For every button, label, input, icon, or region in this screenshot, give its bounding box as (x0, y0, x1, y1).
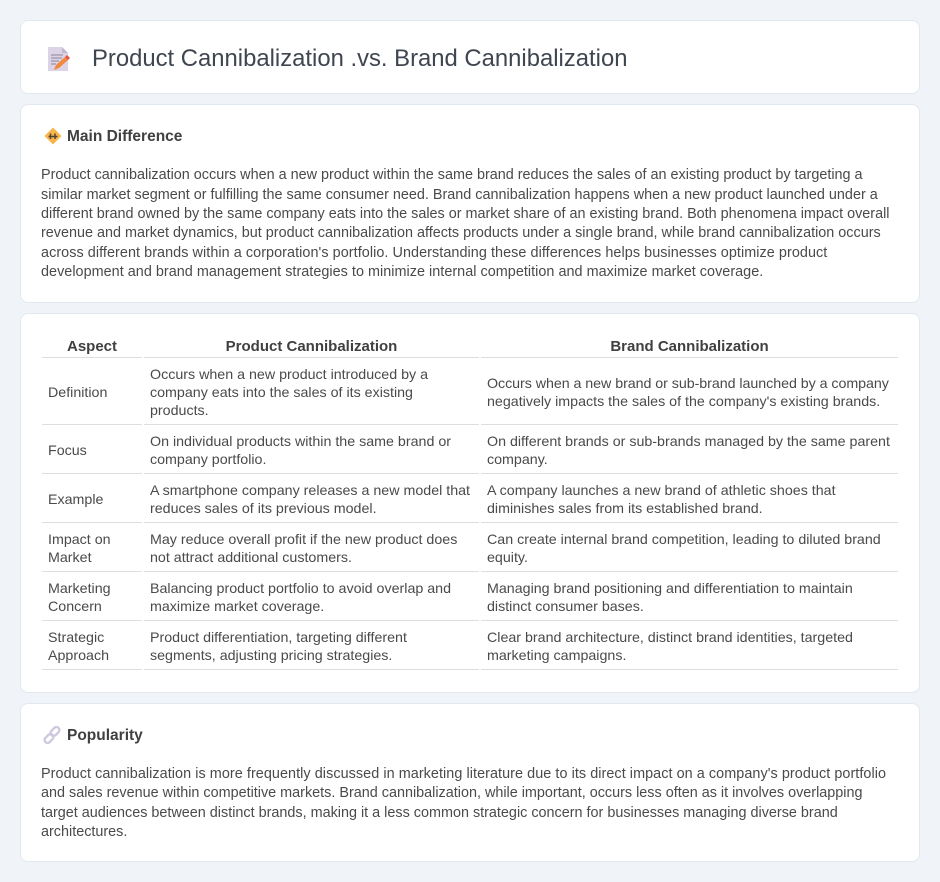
row: impact on market: May reduce overall profit if the new product does (150, 532, 457, 548)
text: popularity paragraph: architectures. (41, 824, 127, 840)
row: definition: Occurs when a new product introduced by a (150, 367, 428, 383)
row: focus: On different brands or sub-brands managed by the same parent (487, 434, 890, 450)
row: marketing concern: distinct consumer bases. (487, 599, 644, 615)
text: main difference paragraph: similar market segment or fulfilling the same consumer need. Brand cannibalization happens when a new product launched under a (41, 187, 878, 203)
text: popularity paragraph: and sales revenue within competitive markets. Brand cannibalization, while important, occurs less often as it involves overlapping (41, 785, 862, 801)
icon: chain link (43, 726, 60, 744)
panel: popularity (20, 703, 920, 862)
row: strategic approach (48, 630, 853, 664)
row: focus: On individual products within the same brand or (150, 434, 451, 450)
row: definition: Definition (48, 385, 107, 401)
text: main difference paragraph (41, 167, 889, 280)
row: definition: company eats into the sales of its existing (150, 385, 413, 401)
row: example: A smartphone company releases a new model that (150, 483, 470, 499)
table header: Brand Cannibalization (610, 338, 769, 355)
row: focus: Focus (48, 443, 87, 459)
row: definition: Occurs when a new brand or sub-brand launched by a company (487, 376, 889, 392)
row: example (48, 483, 836, 517)
row: impact on market: Can create internal brand competition, leading to diluted brand (487, 532, 881, 548)
row: definition: negatively impacts the sales of the company's existing brands. (487, 394, 880, 410)
row: example: A company launches a new brand of athletic shoes that (487, 483, 836, 499)
row: strategic approach: Approach (48, 648, 109, 664)
header card (20, 20, 920, 94)
row: marketing concern: maximize market coverage. (150, 599, 324, 615)
row: focus: company. (487, 452, 548, 468)
text: main difference paragraph: across different brands within a corporation's portfolio. Understanding these differences helps businesses optimize product (41, 245, 827, 261)
row: focus: company portfolio. (150, 452, 266, 468)
row: example: diminishes sales from its established brand. (487, 501, 763, 517)
row: strategic approach: Product differentiation, targeting different (150, 630, 407, 646)
icon: document with pencil (48, 47, 70, 71)
text: main difference paragraph: Product cannibalization occurs when a new product within the same brand reduces the sales of an existing product by targeting a (41, 167, 863, 183)
row: impact on market: equity. (487, 550, 528, 566)
row: definition (48, 367, 889, 419)
row: definition: products. (150, 403, 209, 419)
heading: popularity: Popularity (67, 727, 143, 744)
title: Product Cannibalization .vs. Brand Cannibalization (92, 45, 627, 72)
text: main difference paragraph: development and brand management strategies to minimize internal competition and maximize market coverage. (41, 264, 763, 280)
table header: Aspect (67, 338, 117, 355)
row: marketing concern: Balancing product portfolio to avoid overlap and (150, 581, 451, 597)
row: strategic approach: segments, adjusting pricing strategies. (150, 648, 392, 664)
row: impact on market: Market (48, 550, 92, 566)
row: example: reduces sales of its previous model. (150, 501, 377, 517)
text: popularity paragraph: target audiences between distinct brands, making it a less common strategic concern for businesses managing diverse brand (41, 805, 838, 821)
row: marketing concern: Concern (48, 599, 102, 615)
heading: main difference: Main Difference (67, 128, 182, 145)
row: strategic approach: Clear brand architecture, distinct brand identities, targeted (487, 630, 853, 646)
panel: comparison table (20, 313, 920, 693)
text: main difference paragraph: revenue and market dynamics, but product cannibalization affects products under a single brand, while brand cannibalization occurs (41, 225, 881, 241)
text: popularity paragraph: Product cannibalization is more frequently discussed in marketing literature due to its direct impact on a company's product portfolio (41, 766, 886, 782)
row: impact on market: not attract additional customers. (150, 550, 352, 566)
row: marketing concern: Managing brand positioning and differentiation to maintain (487, 581, 853, 597)
table header (67, 338, 769, 355)
text: main difference paragraph: different brand owned by the same company eats into the sales or market share of an existing brand. Both phenomena impact overall (41, 206, 889, 222)
table header: Product Cannibalization (226, 338, 397, 355)
row: marketing concern (48, 581, 853, 615)
row: impact on market: Impact on (48, 532, 111, 548)
row: marketing concern: Marketing (48, 581, 111, 597)
text: popularity paragraph (41, 766, 886, 840)
row: strategic approach: Strategic (48, 630, 104, 646)
row: focus (48, 434, 890, 468)
row: impact on market (48, 532, 881, 566)
row: strategic approach: marketing campaigns. (487, 648, 626, 664)
row: example: Example (48, 492, 103, 508)
panel: main difference (20, 104, 920, 303)
icon: diamond sign (44, 128, 62, 144)
